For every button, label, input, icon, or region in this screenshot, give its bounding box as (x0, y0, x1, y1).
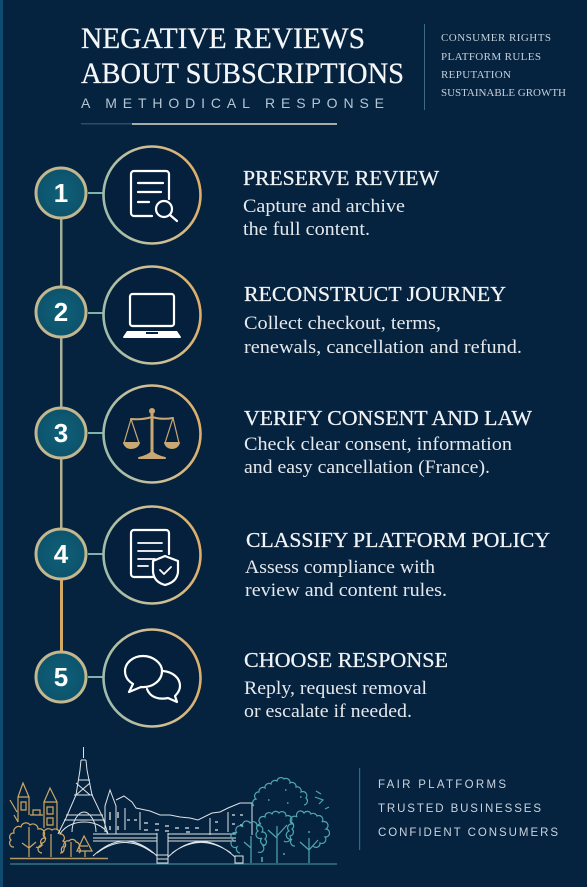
step 5 number: 5 (54, 662, 68, 692)
right trees (231, 778, 330, 863)
step 2 number: 2 (54, 297, 68, 327)
title: NEGATIVE REVIEWS (81, 23, 365, 55)
step 2 text: Collect checkout, terms, (244, 314, 441, 334)
step 4 ring (104, 506, 200, 604)
paris skyline illustration (10, 747, 337, 864)
step 5 heading: CHOOSE RESPONSE (244, 648, 448, 672)
title underline (81, 123, 337, 125)
step 4 (36, 506, 550, 604)
topic list: CONSUMER RIGHTS (441, 32, 551, 44)
bridge (93, 833, 243, 863)
city row houses (105, 790, 252, 835)
step 4 text: review and content rules. (245, 581, 447, 601)
icon: document with shield (131, 530, 178, 585)
step 3 (36, 386, 532, 482)
step 1 number: 1 (54, 178, 68, 208)
step 4 text (245, 558, 447, 601)
step 1 number (36, 168, 103, 218)
topic list: PLATFORM RULES (441, 51, 541, 63)
subtitle: A METHODICAL RESPONSE (81, 95, 384, 111)
step 4 text: Assess compliance with (245, 558, 435, 578)
step 2 text: renewals, cancellation and refund. (244, 338, 522, 358)
topic list: SUSTAINABLE GROWTH (441, 87, 566, 99)
icon: laptop (123, 294, 181, 338)
step 5 text: Reply, request removal (244, 679, 427, 699)
step 3 number (36, 408, 103, 458)
icon: document with magnifier (131, 171, 177, 221)
step 3 text: and easy cancellation (France). (244, 458, 490, 478)
step 4 number: 4 (54, 539, 69, 569)
step 3 text: Check clear consent, information (244, 435, 512, 455)
step 5 number (36, 652, 103, 702)
step 3 ring (104, 386, 200, 482)
ground lines (10, 858, 108, 860)
step 1 heading: PRESERVE REVIEW (243, 166, 439, 190)
step 5 text: or escalate if needed. (244, 702, 412, 722)
left buildings and trees (10, 783, 92, 857)
topic list: REPUTATION (441, 69, 511, 81)
step 1 text (243, 197, 405, 240)
step 5 (36, 630, 448, 726)
step 3 heading: VERIFY CONSENT AND LAW (244, 406, 532, 430)
step 3 text (244, 435, 512, 478)
step 3 number: 3 (54, 418, 68, 448)
step 4 heading: CLASSIFY PLATFORM POLICY (246, 528, 550, 552)
step 2 text (244, 314, 522, 358)
step 1 ring (104, 146, 200, 244)
step 1 text: Capture and archive (243, 197, 405, 217)
step 1 text: the full content. (243, 220, 370, 240)
footer values (378, 779, 558, 839)
topic list (441, 32, 566, 99)
step 4 number (36, 529, 103, 579)
footer values: TRUSTED BUSINESSES (378, 803, 541, 815)
eiffel tower (58, 747, 108, 834)
header divider (424, 24, 425, 110)
waterline (11, 863, 337, 865)
left edge stripe (0, 0, 3, 887)
title: ABOUT SUBSCRIPTIONS (81, 58, 404, 90)
title (81, 23, 404, 90)
timeline connector (60, 218, 63, 653)
step 2 heading: RECONSTRUCT JOURNEY (244, 282, 506, 306)
step 2 (36, 266, 522, 364)
footer divider (359, 768, 360, 850)
step 2 number (36, 287, 103, 337)
icon: scales of justice (124, 409, 179, 458)
step 1 (36, 146, 439, 244)
step 5 text (244, 679, 427, 722)
footer values: FAIR PLATFORMS (378, 779, 506, 791)
footer values: CONFIDENT CONSUMERS (378, 827, 558, 839)
step 5 ring (104, 630, 200, 726)
step 2 ring (104, 266, 200, 364)
icon: speech bubbles (125, 656, 180, 702)
